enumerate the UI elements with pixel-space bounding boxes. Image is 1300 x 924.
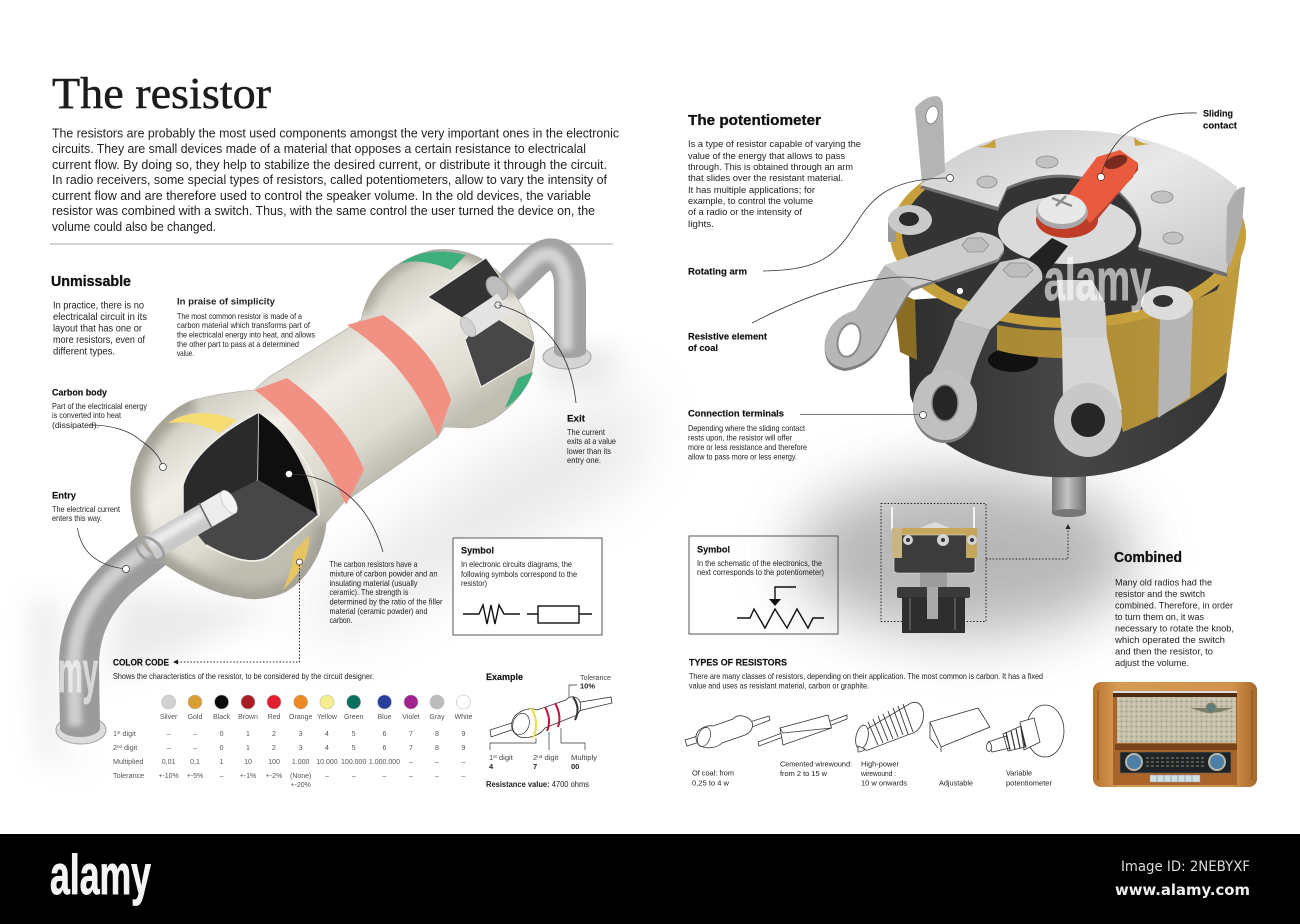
labels: resistor types: potentiometer — [1006, 778, 1052, 788]
callout: entry: enters this way. — [52, 513, 102, 523]
text: in practice: more resistors, even of — [53, 335, 145, 346]
ceramic body — [131, 249, 535, 599]
callout: rotating arm — [688, 174, 954, 278]
text: potentiometer description: of a radio or the intensity of — [688, 207, 802, 217]
row: multiplied: 10 — [244, 759, 252, 766]
callout: carbon mixture: mixture of carbon powder and an — [330, 568, 438, 578]
row: second digit — [113, 743, 466, 752]
labels: resistor types: High-power — [861, 760, 899, 768]
row: multiplied — [113, 757, 466, 766]
website: www.alamy.com — [1115, 881, 1250, 899]
colour code table — [113, 695, 473, 789]
labels: resistor types: Cemented wirewound: — [780, 760, 852, 768]
row: multiplied: 1 — [220, 759, 224, 766]
row: first digit: 5 — [352, 731, 356, 738]
row: tolerance: +-2% — [266, 773, 282, 780]
row: second digit: 2 — [113, 743, 117, 752]
callout: carbon mixture — [286, 470, 443, 625]
example resistor: 4 — [489, 762, 494, 771]
gold side wall — [997, 225, 1245, 432]
terminal arm: left — [825, 232, 1004, 371]
terminal arm: centre — [913, 258, 1042, 443]
row: tolerance: – — [325, 773, 329, 780]
row: second digit: 7 — [409, 745, 413, 752]
row: tolerance: – — [462, 773, 466, 780]
callout: exit — [495, 302, 616, 465]
shadow: potentiometer — [795, 475, 1135, 635]
dark housing — [908, 280, 1227, 477]
text: in praise of simplicity: In praise of simplicity — [177, 296, 276, 308]
text: in practice — [53, 300, 147, 358]
row: multiplied: 10.000 — [316, 759, 338, 766]
callout: connection terminals: more or less resistance and therefore — [688, 442, 807, 452]
heading: the potentiometer: The potentiometer — [688, 113, 821, 129]
row: tolerance: – — [220, 773, 224, 780]
text: potentiometer description: lights. — [688, 219, 714, 229]
colour names: Yellow — [317, 714, 338, 721]
icon: high-power wirewound — [854, 702, 923, 752]
callout: carbon mixture: material (ceramic powder) and — [330, 606, 428, 616]
upright tab right — [1226, 187, 1245, 267]
callout: entry: Entry — [52, 490, 77, 502]
section: combined: to turn them on, it was — [1115, 612, 1204, 623]
text: in praise of simplicity: value. — [177, 348, 194, 358]
footer bar — [0, 834, 1300, 924]
example resistor: Example — [486, 672, 523, 683]
body edge shading — [131, 249, 515, 599]
row: second digit: 1 — [246, 745, 250, 752]
icon: variable potentiometer — [986, 705, 1064, 757]
panel: resistor symbol: resistor) — [461, 578, 487, 588]
row: first digit: 4 — [325, 731, 329, 738]
row: first digit: digit — [121, 729, 136, 738]
text: in practice: In practice, there is no — [53, 300, 144, 312]
callout: exit: The current — [567, 427, 606, 437]
intro paragraph — [52, 126, 619, 234]
callout: exit: entry one. — [567, 455, 601, 465]
text: potentiometer description: through. This is obtained through an arm — [688, 162, 853, 172]
callout: resistive element — [688, 277, 964, 354]
row: second digit: 9 — [462, 745, 466, 752]
row: multiplied: 100 — [268, 759, 280, 766]
labels: resistor types: 0,25 to 4 w — [692, 778, 730, 788]
photo: old radio — [1093, 682, 1257, 787]
callout: exit: lower than its — [567, 446, 611, 456]
text: potentiometer description: example, to control the volume — [688, 196, 813, 206]
colour names: Gold — [188, 714, 202, 721]
example resistor: Multiply — [571, 753, 597, 762]
screw — [1036, 194, 1088, 229]
example resistor: digit — [497, 753, 514, 762]
gold rim and interior — [890, 142, 1246, 328]
row: second digit: 6 — [383, 745, 387, 752]
row: first digit: 2 — [272, 731, 276, 738]
row: second digit: digit — [122, 743, 137, 752]
row: multiplied: 1.000 — [292, 759, 310, 766]
intro paragraph: circuits. They are small devices made of a material that opposes a certain resistance to electricalal — [52, 142, 586, 156]
callout: connection terminals — [688, 408, 926, 462]
example resistor: 2 — [533, 753, 537, 762]
heading: unmissable: Unmissable — [51, 274, 131, 290]
section: combined — [1114, 550, 1234, 669]
text: potentiometer description: Is a type of resistor capable of varying the — [688, 139, 861, 149]
intro paragraph: current flow and are therefore used to control the speaker volume. In the old devices, the variable — [52, 189, 591, 203]
row: tolerance: – — [352, 773, 356, 780]
row: first digit: st — [117, 730, 121, 735]
colour names: Black — [213, 714, 231, 721]
example resistor: nd — [537, 754, 543, 759]
row: second digit: 8 — [435, 745, 439, 752]
row: first digit: 1 — [246, 731, 250, 738]
example resistor: 00 — [571, 762, 579, 771]
intro paragraph: resistor was combined with a switch. Thus, with the same control the user turned the device on, the — [52, 204, 595, 218]
small potentiometer side view — [881, 504, 986, 633]
callout: resistive element: Resistive element — [688, 332, 768, 342]
callout: sliding contact: contact — [1203, 120, 1238, 132]
section: types of resistors: There are many classes of resistors, depending on their application. The most common is carbon. It has a fixed — [689, 671, 1043, 681]
row: tolerance: +-1% — [240, 773, 256, 780]
callout: connection terminals: Connection terminals — [688, 408, 784, 420]
text: in praise of simplicity — [177, 296, 315, 358]
row: second digit: – — [193, 745, 197, 752]
example resistor: st — [493, 754, 498, 759]
row: multiplied: Multiplied — [113, 757, 143, 766]
callout: sliding contact: Sliding — [1203, 108, 1233, 120]
row: first digit: – — [193, 731, 197, 738]
callout: carbon body: Part of the electricalal energy — [52, 401, 148, 411]
terminal arm: right — [1054, 280, 1122, 457]
resistor illustration — [56, 249, 591, 744]
right strip and ring — [1141, 286, 1193, 418]
colour names: Brown — [238, 714, 258, 721]
example resistor: 10% — [580, 682, 595, 690]
example resistor: Tolerance — [580, 673, 611, 682]
row: first digit — [113, 729, 466, 738]
row: second digit: 3 — [299, 745, 303, 752]
text: potentiometer description — [688, 139, 861, 229]
example resistor: 7 — [533, 762, 537, 771]
callout: carbon mixture: The carbon resistors have a — [330, 559, 418, 569]
callout: connection terminals: rests upon, the resistor will offer — [688, 432, 792, 442]
icon: cemented wirewound — [758, 715, 847, 746]
text: in praise of simplicity: carbon material which transforms part of — [177, 320, 311, 330]
row: first digit: 3 — [299, 731, 303, 738]
upper cutaway — [428, 258, 535, 387]
callout: carbon mixture: insulating material (usually — [330, 578, 418, 588]
intro paragraph: volume could also be changed. — [52, 220, 216, 234]
row: multiplied: – — [409, 759, 413, 766]
example drawing — [490, 685, 612, 750]
callout: carbon mixture: carbon. — [330, 615, 352, 625]
section: combined: necessary to rotate the knob, — [1115, 624, 1234, 634]
labels: resistor types: Of coal: from — [692, 768, 734, 778]
section: combined: and then the resistor, to — [1115, 646, 1213, 658]
text: my — [58, 640, 98, 705]
top plate — [920, 130, 1237, 277]
logo: alamy — [50, 843, 151, 906]
callout: connection terminals: Depending where the sliding contact — [688, 423, 806, 433]
title: The resistor — [52, 69, 271, 118]
callout: resistive element: of coal — [688, 343, 718, 354]
labels: resistor types — [692, 760, 1052, 788]
callout: rotating arm: Rotating arm — [688, 266, 747, 278]
image id: Image ID: 2NEBYXF — [1121, 859, 1250, 875]
labels: resistor types: Variable — [1006, 768, 1032, 778]
heading: colour code: Shows the characteristics of the resistor, to be considered by the circuit designer. — [113, 671, 374, 681]
panel: potentiometer symbol: next corresponds to the potentiometer) — [697, 567, 824, 577]
watermark: alamy — [1044, 248, 1151, 313]
example resistor: 1 — [489, 753, 493, 762]
row: first digit: 6 — [383, 731, 387, 738]
centre disc — [998, 196, 1136, 264]
callout: carbon mixture: determined by the ratio of the filler — [330, 596, 443, 606]
row: first digit: – — [167, 731, 171, 738]
heading: colour code — [113, 658, 374, 681]
callout: connection terminals: allow to pass more or less energy. — [688, 452, 797, 462]
section: combined: Combined — [1114, 550, 1182, 566]
callout: carbon body: Carbon body — [52, 388, 108, 398]
divider rule — [50, 243, 613, 245]
example resistor: digit — [542, 753, 559, 762]
example resistor: Resistance value: 4700 ohms — [486, 780, 589, 789]
panel: resistor symbol: following symbols correspond to the — [461, 569, 577, 579]
section: types of resistors: TYPES OF RESISTORS — [689, 658, 787, 668]
icon: adjustable — [930, 708, 990, 752]
section: combined: Many old radios had the — [1115, 578, 1212, 588]
row: tolerance: (None) — [290, 773, 311, 780]
exit pipe — [500, 254, 591, 369]
section: combined: resistor and the switch — [1115, 589, 1205, 600]
row: second digit: nd — [117, 744, 123, 749]
row: second digit: – — [167, 745, 171, 752]
colour bands — [168, 252, 533, 590]
row: multiplied: 0,01 — [162, 759, 176, 766]
colour names: Silver — [160, 714, 178, 721]
callout: exit: Exit — [567, 414, 586, 424]
section: combined: adjust the volume. — [1115, 658, 1189, 669]
panel: potentiometer symbol: In the schematic of the electronics, the — [697, 558, 822, 568]
text: in praise of simplicity: The most common resistor is made of a — [177, 311, 302, 321]
callout: entry: The electrical current — [52, 504, 121, 514]
colour names: Blue — [377, 714, 392, 721]
example resistor — [486, 672, 612, 789]
panel: potentiometer symbol — [689, 536, 838, 634]
row: tolerance: +-10% — [158, 773, 179, 780]
red sliding arm — [1036, 150, 1138, 238]
row: tolerance: +-20% — [290, 782, 311, 789]
shadow: resistor — [30, 350, 640, 770]
labels: resistor types: 10 w onwards — [861, 778, 907, 788]
left ring — [888, 205, 932, 242]
row: tolerance: – — [383, 773, 387, 780]
row: multiplied: – — [462, 759, 466, 766]
row: first digit: 0 — [220, 731, 224, 738]
colour names: White — [455, 714, 473, 721]
callout: sliding contact — [1098, 108, 1238, 180]
row: second digit: 4 — [325, 745, 329, 752]
labels: resistor types: wirewound : — [860, 769, 896, 778]
section: types of resistors: value and uses as resistant material, carbon or graphite. — [689, 680, 869, 690]
callout: carbon mixture: ceramic). The strength is — [330, 587, 408, 597]
row: first digit: 9 — [462, 731, 466, 738]
colour names: Green — [344, 714, 364, 721]
callout: carbon body: is converted into heat — [52, 410, 122, 420]
colour names: Orange — [289, 714, 312, 721]
row: multiplied: 0,1 — [190, 759, 200, 766]
colour names — [160, 714, 473, 721]
text: in practice: electricalal circuit in its — [53, 312, 147, 323]
row: tolerance: +-5% — [187, 773, 203, 780]
entry connector — [131, 488, 241, 568]
row: tolerance: Tolerance — [113, 771, 144, 780]
panel: resistor symbol: In electronic circuits diagrams, the — [461, 559, 572, 569]
row: first digit: 8 — [435, 731, 439, 738]
lower cutaway — [183, 412, 319, 561]
row: second digit: 0 — [220, 745, 224, 752]
central slot — [1025, 238, 1068, 275]
section: combined: which operated the switch — [1114, 635, 1225, 646]
entry pipe — [56, 538, 165, 744]
section: combined: combined. Therefore, in order — [1115, 600, 1234, 612]
intro paragraph: In radio receivers, some special types of resistors, called potentiometers, allow to vary the intensity of — [52, 173, 607, 187]
shaft — [1052, 465, 1086, 517]
callout: carbon body — [52, 388, 166, 470]
intro paragraph: The resistors are probably the most used components amongst the very important ones in the electronic — [52, 126, 619, 140]
section: types of resistors — [689, 658, 1043, 690]
colour names: Gray — [429, 714, 445, 721]
row: second digit: 5 — [352, 745, 356, 752]
upright tab left — [915, 96, 945, 183]
text: in practice: layout that has one or — [53, 324, 143, 334]
text: potentiometer description: It has multiple applications; for — [688, 185, 815, 195]
panel: resistor symbol — [453, 538, 602, 635]
row: first digit: 7 — [409, 731, 413, 738]
row: tolerance: – — [409, 773, 413, 780]
panel: resistor symbol: Symbol — [461, 546, 494, 556]
dotted connector: potentiometer — [986, 524, 1070, 559]
row: multiplied: – — [435, 759, 439, 766]
text: in practice: different types. — [53, 346, 115, 358]
row: first digit: 1 — [113, 729, 117, 738]
text: in praise of simplicity: the electricalal energy into heat, and allows — [177, 330, 315, 340]
left gold tab — [893, 290, 917, 360]
row: multiplied: 1.000.000 — [369, 759, 400, 766]
callout: entry — [52, 490, 130, 572]
row: second digit: 2 — [272, 745, 276, 752]
callout: exit: exits at a value — [567, 436, 616, 446]
dotted connector: colour code — [173, 559, 302, 664]
colour swatches — [162, 695, 470, 709]
text: in praise of simplicity: the other part to pass at a determined — [177, 339, 299, 349]
icon: carbon resistor — [685, 716, 770, 748]
callout: carbon body: (dissipated). — [52, 420, 99, 430]
row: multiplied: 100.000 — [341, 759, 366, 766]
colour names: Red — [268, 714, 281, 721]
row: tolerance — [113, 771, 466, 789]
text: potentiometer description: value of the energy that allows to pass — [688, 151, 845, 161]
colour names: Violet — [402, 714, 420, 721]
labels: resistor types: Adjustable — [939, 778, 973, 788]
exit connector — [457, 272, 512, 339]
row: tolerance: – — [435, 773, 439, 780]
potentiometer illustration — [825, 96, 1246, 517]
labels: resistor types: from 2 to 15 w — [780, 769, 827, 778]
panel: potentiometer symbol: Symbol — [697, 544, 730, 556]
text: potentiometer description: that slides over the resistant material. — [688, 173, 843, 183]
intro paragraph: current flow. By doing so, they help to stabilize the desired current, or distribute it through the circuit. — [52, 158, 607, 172]
heading: colour code: COLOR CODE — [113, 658, 169, 668]
